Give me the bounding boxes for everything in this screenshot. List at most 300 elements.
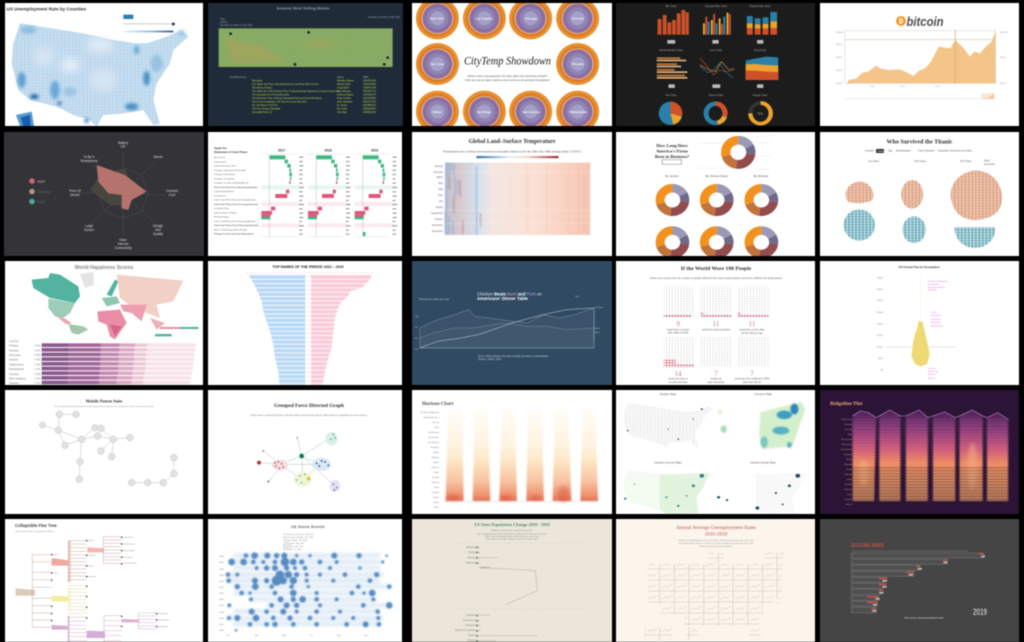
happiness scores: 7.495 — [34, 358, 41, 362]
occupation annotations: Workers — [928, 373, 937, 376]
state names: Alaska — [468, 551, 476, 554]
intro text: Source: Bureau of Labor Statistics — [699, 545, 733, 548]
counts: 11 — [713, 320, 720, 328]
title: unemployment rates — [676, 525, 756, 538]
captions: to cook and heat — [669, 381, 688, 384]
radar labels: And — [155, 228, 161, 232]
happiness scores: 7.555 — [34, 353, 41, 357]
books table: The Very Hungry Caterpillar — [252, 108, 281, 110]
row labels: Net Income — [214, 156, 226, 159]
month labels: April — [438, 182, 443, 185]
books table: ISBN — [363, 77, 369, 79]
dashboard labels: Gauge Chart — [753, 93, 768, 97]
month labels: March — [436, 176, 444, 179]
mirrored bars — [247, 273, 373, 385]
title: CityTemp Showdown: CityTemp Showdown — [464, 56, 551, 68]
scatter map — [623, 403, 713, 448]
counts: 7 — [714, 370, 718, 378]
title: annual pay: US Annual Pay by Occupation — [898, 265, 940, 269]
month labels: November — [432, 224, 443, 227]
month labels — [219, 556, 369, 637]
month labels: Jul — [310, 635, 313, 637]
city labels: Los Angeles — [475, 16, 493, 20]
occupation annotations: Chief — [931, 312, 936, 314]
occupation annotations: Executives — [931, 314, 942, 317]
month labels: May — [282, 635, 287, 637]
month labels: Mar — [255, 634, 259, 637]
series labels: Rental Car Agencies — [421, 411, 439, 414]
country names: Denmark — [9, 353, 21, 357]
map titles: Hexbin (Area) Map — [750, 460, 776, 464]
panel: mobile patent suits — [5, 390, 203, 514]
books table: The 5 Love Languages: The Secret to Love that Lasts — [252, 100, 308, 104]
books table: 0802412702 — [363, 102, 376, 104]
counts: 7 — [750, 370, 754, 378]
panel: top names pyramid — [208, 261, 402, 385]
map titles — [655, 392, 776, 464]
books table: Mark Manson — [337, 90, 352, 93]
footnote — [478, 355, 549, 361]
happiness scores: 7.324 — [34, 376, 41, 380]
panel: US unemployment map — [5, 3, 203, 127]
legend labels: Author: — [220, 20, 229, 24]
happiness scores — [34, 344, 41, 385]
axis note: Pounds per capita per year — [419, 298, 449, 301]
panel: radar chart — [4, 132, 204, 256]
series labels: Dentists — [432, 491, 439, 494]
title: chicken: Chicken Beats Beef and Pork on — [477, 292, 542, 296]
row labels: Capital Expenditures — [214, 190, 235, 193]
intro text: Move your mouse over the number of people affected from each social problem and how it affects the whole planet — [650, 276, 782, 280]
data labels: 100 — [415, 316, 419, 318]
series labels: Restaurants — [428, 431, 439, 434]
row labels: Change in Inventories — [214, 173, 236, 176]
series labels: Dentists — [845, 498, 852, 501]
series labels: Parks — [847, 494, 852, 496]
axis labels: 2019 — [900, 86, 906, 88]
panel: bitcoin price chart — [820, 3, 1019, 126]
ridgeline bands — [851, 410, 1009, 503]
panel: world happiness scores — [5, 261, 203, 385]
radar labels: Connectivity — [114, 246, 132, 250]
heading: Been in Business? — [655, 154, 689, 159]
state names: Florida — [468, 634, 476, 637]
axis labels: $6000 — [1000, 57, 1007, 59]
series labels: Bars — [435, 427, 439, 429]
title: brands: 2019 GLOBAL BRANDS — [851, 543, 884, 549]
books table: Dr. Seuss — [337, 104, 348, 107]
title: ridgeline: Ridgeline Plot — [830, 401, 863, 407]
series labels: Hospitals — [431, 446, 439, 449]
intro text — [465, 74, 550, 82]
month labels: 2006 — [219, 618, 225, 620]
happiness scores: 7.487 — [34, 362, 41, 366]
intro text: Change of unemployment rate in 50 states with annual averages for each state — [678, 539, 755, 542]
occupation annotations: Anesthesiologists — [928, 286, 946, 289]
state names: District of Columbia — [455, 629, 476, 632]
data labels: Year — [575, 295, 580, 298]
series labels: Theaters — [431, 481, 439, 484]
occupation annotations: Family and General — [928, 280, 948, 283]
row labels: Dividends Paid — [214, 208, 229, 210]
month labels: 2005 — [219, 612, 225, 614]
counts — [674, 320, 756, 378]
filter tabs: Died — [984, 158, 990, 162]
series labels: Gas Stations — [841, 448, 852, 451]
month labels — [431, 165, 444, 233]
occupation annotations: Cashiers — [928, 367, 938, 370]
month labels: September — [431, 212, 443, 215]
series labels: Pharmacies — [428, 437, 439, 439]
data labels: Pork — [595, 331, 600, 334]
radar labels: Internet — [118, 242, 129, 246]
row labels: Depreciation — [214, 160, 227, 163]
legend of top events: Aug Hurricane (Sandy) - NY, 2012 — [283, 536, 314, 539]
occupation annotations: Practitioners — [928, 283, 941, 286]
dashboard labels: Bar Chart — [665, 4, 677, 8]
panel: cash flow waterfall statement — [208, 132, 402, 256]
legend labels — [220, 15, 401, 27]
title: Amazon books: Amazon Best Selling Books — [277, 6, 330, 10]
month labels: 2004 — [219, 605, 225, 607]
footnote: Source: USDA, 2015 — [478, 358, 502, 361]
captions: would die from malaria by 2050 — [735, 378, 770, 380]
books table: Rebecca Skloot — [337, 94, 353, 96]
series labels: Libraries — [431, 467, 439, 469]
title: chicken: Americans' Dinner Table — [477, 296, 529, 301]
series labels: Banks — [433, 452, 439, 454]
filter tabs: Survived — [984, 162, 995, 166]
month labels: February — [433, 171, 444, 174]
panel: US annual pay by occupation — [820, 261, 1019, 385]
dashboard labels: Line Chart — [710, 48, 722, 52]
series labels: Cleaning — [844, 424, 852, 426]
series labels: Retail — [434, 506, 440, 509]
dashboard labels: Donut Chart — [709, 93, 723, 97]
panel: CityTemp Showdown — [412, 0, 612, 133]
books table: Paulo Coelho — [337, 98, 352, 100]
dumbbell chart — [453, 543, 584, 642]
pay axis labels: $250k — [877, 312, 884, 314]
legend labels: Number of Years in Top 100 — [368, 15, 401, 19]
dashboard labels: Horizontal Bar Chart — [659, 48, 683, 52]
state names — [455, 546, 491, 642]
title: unemployment rates: Annual Average Unemployment Rates — [676, 525, 756, 531]
country names: Netherlands — [9, 367, 25, 371]
radar labels: Life — [120, 144, 126, 148]
filter tabs: 1st Class — [868, 159, 880, 163]
radar labels: Price Of — [69, 189, 81, 193]
series labels: Gas Stations — [428, 441, 439, 444]
statement headings: Apple Inc. — [214, 146, 228, 150]
books table: Oh, the Places You'll Go! — [252, 104, 278, 107]
books table: 0062315005 — [363, 98, 376, 100]
filter tabs: Separate Survived and Died — [938, 148, 972, 152]
title: chicken — [477, 292, 542, 301]
data labels — [415, 295, 604, 351]
title: force graph: Grouped Force Directed Graph — [274, 403, 344, 409]
row labels — [214, 156, 260, 236]
intro text: States sorted alphabetically, scroll and hover over to see — [485, 535, 540, 538]
books table: The Immortal Life of Henrietta Lacks — [252, 94, 290, 96]
icon grids — [664, 286, 768, 367]
source note: Data source: Interbrand global brands — [904, 616, 945, 620]
data labels: 60 — [415, 338, 418, 340]
month labels: 2001 — [219, 587, 225, 589]
pay axis labels: $400k — [877, 278, 884, 280]
books table: Becoming — [252, 80, 263, 82]
series labels: Restaurants — [841, 438, 852, 441]
map titles: Contour Map — [754, 392, 772, 396]
state names: Georgia — [467, 639, 476, 642]
axis labels: $10000 — [836, 32, 844, 34]
series labels: Banks — [846, 459, 852, 461]
series labels: Offices — [846, 504, 852, 506]
axis labels: 2018 — [870, 86, 876, 88]
panel: horizon chart — [412, 390, 612, 514]
legend labels: Title: — [220, 17, 226, 21]
books table: Eric Carle — [337, 108, 348, 110]
radar legend: Samsung — [37, 190, 51, 194]
city labels: Philadelphia — [569, 110, 587, 114]
series labels: Offices — [433, 497, 439, 499]
panel: US storm events — [208, 519, 402, 642]
month labels: 2003 — [219, 599, 225, 601]
statement headings: 2018 — [324, 148, 332, 152]
title: mobile patent suits: Mobile Patent Suits — [86, 398, 123, 404]
pay axis labels: $350k — [877, 289, 884, 291]
grouped bar chart — [703, 13, 731, 35]
books table: 159562015X — [363, 112, 376, 114]
year label: 2019 — [973, 607, 987, 617]
ranked table bars — [42, 343, 196, 384]
counts: 9 — [676, 320, 680, 328]
filter tabs: Age — [888, 148, 893, 152]
series labels: Grocery — [845, 429, 852, 431]
beeswarm — [886, 277, 956, 366]
heatmap of temperature anomalies — [445, 163, 590, 235]
slider and legend controls — [123, 15, 175, 32]
intro text: Alabama to Wisconsin, population by state — [491, 529, 533, 532]
map titles: Scatter Map — [660, 392, 676, 396]
series labels: Hotels — [846, 468, 852, 471]
section labels — [664, 174, 769, 178]
city labels: Chicago — [525, 16, 537, 20]
intro text: Net change between 2010 and 2018 according to US Census estimates — [477, 532, 548, 536]
state names: Alabama — [466, 546, 476, 549]
intro text: Click any city for daily maximum and minimum temperature breakdown! — [465, 78, 550, 82]
occupation annotations: Engineers — [931, 321, 942, 324]
legend of top events: Oct Flash Flood - TN, 2010 — [283, 539, 308, 542]
month labels: 1998 — [219, 569, 225, 571]
filter tabs — [865, 148, 995, 166]
dashboard labels — [659, 4, 771, 116]
counts: 14 — [674, 370, 682, 378]
four mini maps — [623, 402, 809, 514]
heading: How Long Have — [656, 143, 688, 148]
month labels: Nov — [364, 635, 369, 637]
row labels: Sale Purchase of Stock — [214, 211, 238, 214]
contour map — [718, 402, 805, 449]
network graph — [39, 411, 177, 486]
filter tabs: Class — [877, 149, 884, 153]
filter tabs: Embarkation — [896, 148, 912, 152]
statement headings: Statement of Cash Flows — [214, 150, 248, 154]
radar labels: Design — [153, 224, 163, 228]
pie chart — [659, 102, 682, 125]
bitcoin logo and name: ₿ — [899, 18, 904, 25]
happiness scores: 7.328 — [34, 372, 41, 376]
row labels: Total Cash Flows From Investing Activities — [214, 203, 259, 206]
captions: safe water to drink — [668, 332, 689, 334]
filter buttons — [667, 40, 763, 88]
intro text: the number of people moving in and out of each state — [486, 538, 539, 540]
books table: Year Rank Times — [229, 76, 247, 79]
books table: The Subtle Art of Not Giving a F*ck: A Counterintuitive Approach to Living a Good Life — [252, 90, 340, 93]
bitcoin logo and name: bitcoin — [906, 15, 944, 29]
radar labels: Large — [85, 224, 93, 228]
radar legend: Nokia — [37, 200, 45, 204]
month labels: 2007 — [219, 624, 225, 626]
books table: 1400052173 — [363, 94, 376, 96]
country names: Sweden — [9, 381, 20, 385]
subtitle: Each node is colored by group; hulls are drawn around each group. Drag nodes to reorganise the force layout. — [251, 414, 368, 417]
month labels: 2002 — [219, 593, 225, 595]
captions: than from the flu — [743, 381, 762, 384]
title: storm events: US Storm Events — [291, 525, 325, 529]
city labels: Houston — [572, 16, 584, 20]
radar labels: Brand — [154, 155, 162, 159]
pay axis labels: $200k — [877, 324, 884, 326]
occupation annotations: Petroleum — [931, 318, 941, 321]
month labels: December — [432, 230, 443, 233]
series labels: Theaters — [844, 488, 852, 491]
intro text — [477, 529, 548, 540]
captions: would have no clean — [667, 328, 690, 332]
waterfall columns — [261, 154, 397, 237]
legend of top events: Sep Flood - TX, 2017 — [283, 549, 303, 551]
row labels: Effect Of Exchange Rate Changes — [214, 228, 248, 231]
series labels — [421, 411, 440, 509]
panel: dark dashboard of charts — [616, 3, 815, 126]
radar labels: Quality — [153, 232, 163, 236]
panel: top global brands race — [820, 519, 1019, 642]
radar labels — [69, 141, 178, 250]
pay axis labels: $100k — [877, 346, 884, 348]
title: land-surface temperature: Global Land–Surface Temperature — [469, 139, 556, 145]
dashboard labels: Stacked Bar Chart — [749, 4, 771, 8]
captions: would be undernourished — [702, 328, 731, 332]
radar labels: Cost — [169, 193, 175, 197]
panel: collapsible flex tree — [5, 519, 203, 642]
tile grid map — [645, 552, 784, 640]
books table: The Alchemist: Fear of Flying, Paperback Novel and Great Romance — [252, 97, 323, 100]
happiness scores: 7.441 — [34, 367, 41, 371]
axis labels: 2020 — [935, 86, 941, 88]
panel: US maps — [616, 390, 815, 514]
legend of top events — [283, 533, 314, 551]
data labels: Beef — [595, 328, 600, 330]
donut chart — [706, 104, 725, 123]
country names: Iceland — [9, 358, 18, 362]
colour scale — [476, 156, 558, 158]
captions — [667, 328, 770, 384]
filter tabs: Gender — [865, 148, 874, 152]
row labels: Investments — [214, 194, 227, 197]
panel: global land-surface temperature — [412, 132, 612, 256]
month labels: January — [434, 165, 444, 168]
state names: Arizona — [467, 556, 476, 560]
title: Titanic: Who Survived the Titanic — [887, 140, 953, 146]
state names: Arkansas — [465, 562, 476, 564]
books table: StrengthsFinder 2.0 — [252, 111, 273, 114]
heading — [655, 143, 689, 159]
country names — [9, 339, 26, 385]
books table: 0062457713 — [363, 91, 376, 93]
books table: 0399226907 — [363, 108, 376, 110]
captions: $1.90 USD per day — [741, 332, 763, 335]
intro text: Which of the most populous US cities offers the best living climate? — [468, 74, 548, 78]
captions: have electricity — [708, 381, 725, 384]
footnote: Since 1970s chicken has had a steady increase in consumption — [478, 355, 549, 358]
series labels: Shipping — [431, 457, 439, 459]
month labels: 1997 — [219, 562, 225, 564]
books table: 1338237128 — [363, 88, 376, 90]
radar legend — [29, 178, 51, 204]
title: flex tree: Collapsible Flex Tree — [15, 523, 57, 528]
series labels: Gyms — [847, 479, 852, 481]
title: world happiness: World Happiness Scores — [75, 265, 134, 271]
dashboard labels: Grouped Bar Chart — [705, 4, 727, 8]
intro text — [678, 539, 755, 548]
books table: Tom Rath — [337, 111, 348, 114]
radar labels: Battery — [118, 141, 128, 145]
city labels: Dallas — [433, 110, 442, 114]
books table: 1524763136 — [363, 80, 376, 82]
world map — [32, 272, 198, 340]
donut charts — [660, 135, 774, 254]
pay axis labels: $150k — [877, 335, 884, 337]
series labels: Cleaning Services — [423, 417, 439, 419]
tree diagram — [16, 537, 169, 642]
row labels: Changes in Other Operating Assets — [214, 182, 249, 184]
month labels: August — [436, 206, 443, 209]
price area chart — [845, 30, 996, 99]
month labels: June — [438, 194, 444, 197]
section labels: By Veteran Status — [706, 174, 729, 178]
series labels: Bars — [848, 434, 852, 436]
month labels: May — [438, 188, 444, 191]
row labels: Changes in Payables — [214, 178, 236, 180]
pay axis labels: $0 — [881, 370, 884, 372]
panel: if the world were 100 people — [616, 261, 815, 385]
country names: Norway — [9, 348, 19, 352]
legend labels: Number of Years in Top 100: — [220, 23, 253, 27]
series labels: Rental Cars — [841, 418, 852, 421]
series labels — [841, 418, 852, 506]
axis labels — [836, 32, 1008, 88]
title: unemployment rates: 2010-2018 — [705, 532, 728, 538]
books table: Gary Chapman — [337, 100, 353, 104]
data labels: Chicken — [595, 307, 604, 309]
title: top names: TOP NAMES OF THE PERIOD 1910 – 2016 — [272, 265, 344, 269]
heat grid of books — [219, 28, 393, 67]
month labels: July — [439, 200, 444, 203]
map titles: Hexbin (Count) Map — [655, 460, 682, 464]
section labels: By Gender — [665, 174, 679, 178]
series labels: Grocery — [432, 422, 439, 424]
row labels: Changes in Accounts Receivable — [214, 169, 247, 172]
